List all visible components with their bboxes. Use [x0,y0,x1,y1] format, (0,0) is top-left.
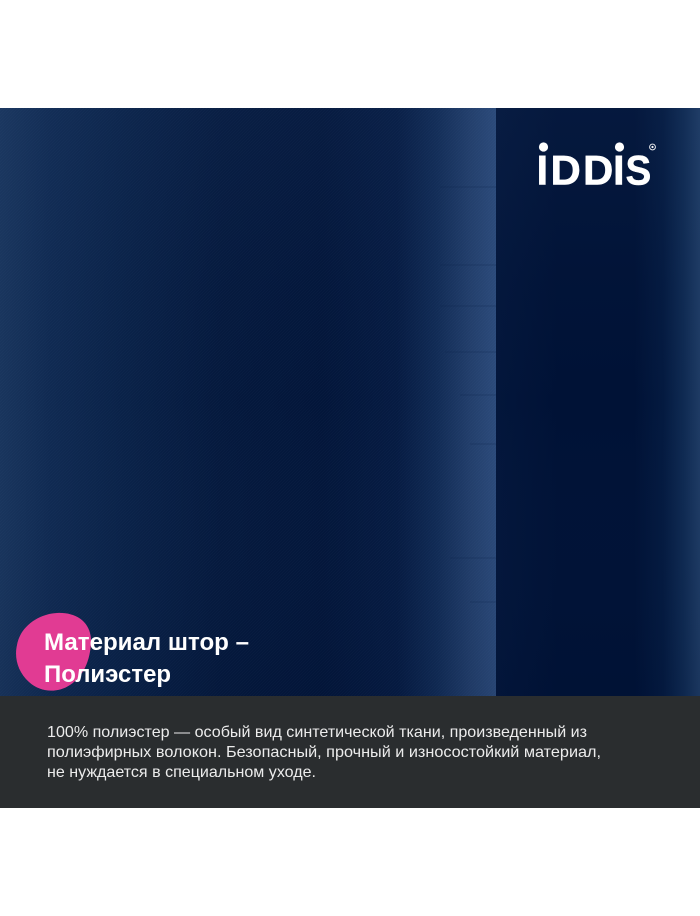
logo: IDDIS [536,142,655,194]
logo: IDDIS: S [626,146,651,194]
panel: description band [0,696,700,808]
panel: fabric photo [0,108,700,696]
logo: IDDIS: IDDI [536,146,625,194]
description text: полиэфирных волокон. Безопасный, прочный и износостойкий материал, [47,744,601,761]
description text [47,724,601,781]
heading: Полиэстер [44,661,171,688]
heading: Материал штор – [44,629,249,656]
description text: 100% полиэстер — особый вид синтетической ткани, произведенный из [47,724,587,741]
main curtain fold [0,108,496,696]
icon: pink blob [16,613,91,691]
description text: не нуждается в специальном уходе. [47,764,316,781]
heading [44,629,249,688]
dark curtain fold [496,108,700,696]
